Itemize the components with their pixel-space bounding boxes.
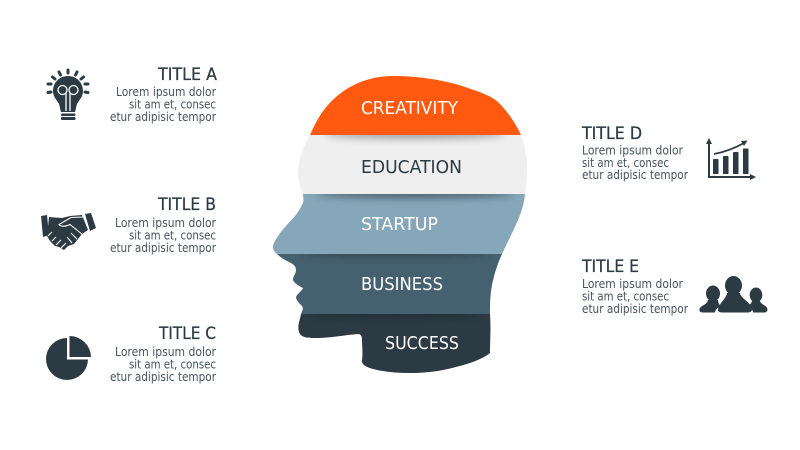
text block: sit am et, consec: [129, 228, 216, 242]
heading: TITLE B: [157, 195, 216, 215]
heading: TITLE A: [157, 65, 217, 85]
text block: etur adipisic tempor: [582, 168, 689, 182]
text block: etur adipisic tempor: [110, 370, 217, 384]
text block: Lorem ipsum dolor: [115, 345, 217, 359]
block: title E: [581, 257, 768, 316]
text block: sit am et, consec: [582, 290, 669, 304]
text block: etur adipisic tempor: [582, 302, 689, 316]
icon: people: [699, 276, 768, 312]
block: title A: [48, 65, 217, 124]
label: startup: STARTUP: [361, 215, 438, 235]
block: title C: [46, 324, 217, 384]
text block: etur adipisic tempor: [110, 241, 217, 255]
label: success: SUCCESS: [385, 334, 459, 354]
text block: etur adipisic tempor: [110, 110, 217, 124]
label: education: EDUCATION: [361, 158, 462, 178]
heading: TITLE D: [581, 124, 642, 144]
icon: handshake: [41, 213, 96, 250]
text block: Lorem ipsum dolor: [116, 85, 217, 99]
text block: Lorem ipsum dolor: [582, 277, 684, 291]
band: success: [298, 309, 490, 373]
band: creativity: [310, 76, 521, 135]
block: title D: [581, 124, 756, 182]
band: business: [277, 249, 502, 314]
text block: sit am et, consec: [129, 358, 216, 372]
band: startup: [273, 188, 525, 254]
icon: bar chart: [706, 138, 756, 180]
text block: Lorem ipsum dolor: [582, 144, 684, 158]
text block: sit am et, consec: [582, 156, 669, 170]
heading: TITLE C: [158, 324, 216, 344]
heading: TITLE E: [581, 257, 639, 277]
icon: pie chart: [46, 336, 91, 380]
label: business: BUSINESS: [361, 275, 443, 295]
text block: Lorem ipsum dolor: [115, 216, 217, 230]
icon: light bulb: [48, 70, 88, 120]
head infographic: [273, 76, 527, 373]
label: creativity: CREATIVITY: [361, 99, 458, 119]
band: education: [298, 129, 527, 194]
text block: sit am et, consec: [129, 98, 216, 112]
block: title B: [41, 195, 217, 255]
